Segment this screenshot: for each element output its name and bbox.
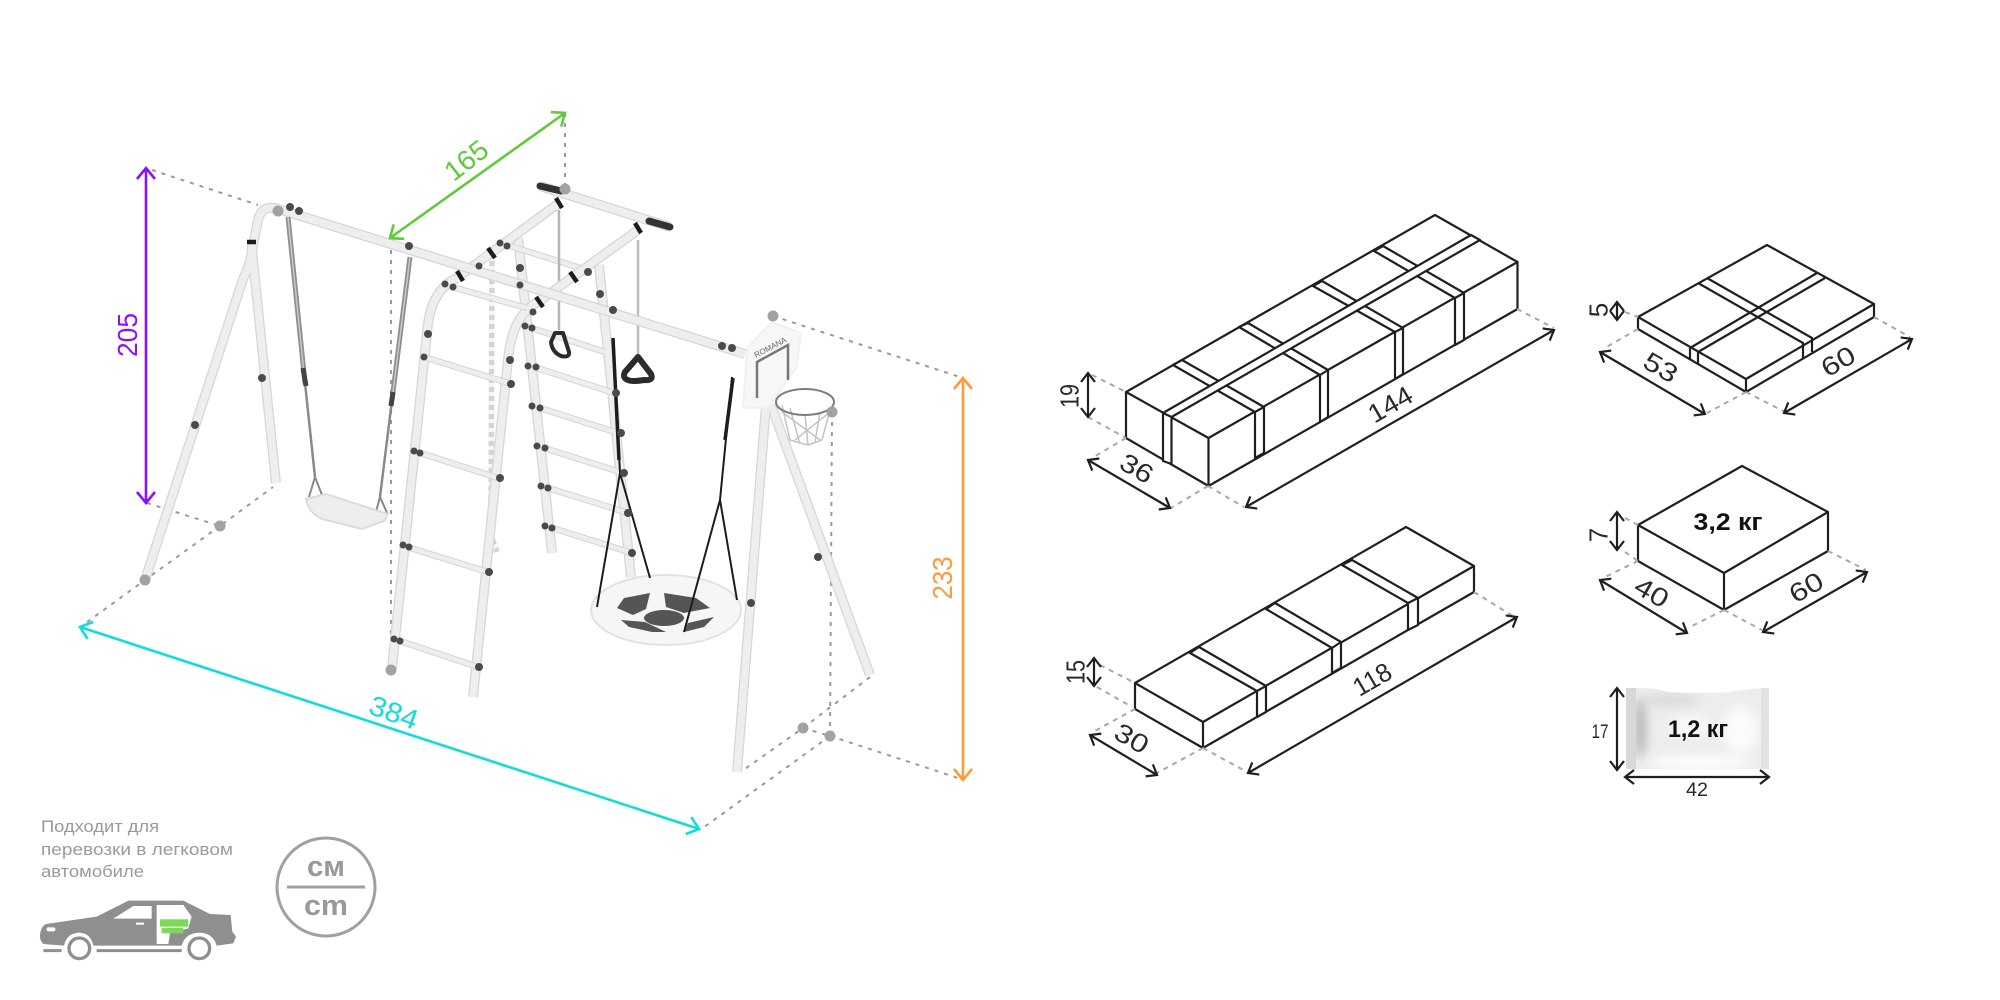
width dimension 384 bbox=[80, 627, 699, 829]
top frame beams and pull-up bar bbox=[457, 186, 670, 302]
main crossbar and left A-frame bbox=[146, 208, 745, 577]
package 4: box 3.2 kg: 7 bbox=[1583, 528, 1613, 542]
basketball hoop and net bbox=[776, 389, 834, 445]
icon: units badge cm: cm bbox=[304, 890, 348, 922]
basketball A-frame bbox=[737, 405, 870, 772]
height dimension 205: 205 bbox=[112, 313, 143, 357]
package 5: soft bag 1.2 kg: 42 bbox=[1686, 780, 1708, 801]
package 2: long flat box: 118 bbox=[1347, 656, 1397, 702]
package 3: flat square box: 53 bbox=[1638, 346, 1683, 389]
package 1: long box: 36 bbox=[1115, 447, 1159, 490]
basketball backboard: ROMANA bbox=[753, 335, 789, 360]
depth dimension 165: 165 bbox=[438, 134, 494, 187]
package 2: long flat box: 30 bbox=[1109, 717, 1154, 760]
package 3 straps bbox=[1690, 273, 1825, 364]
package 3: flat square box: 5 bbox=[1583, 303, 1613, 317]
package 1 cross straps bbox=[1173, 246, 1464, 458]
nest swing with black straps bbox=[591, 338, 741, 645]
package 4: box 3.2 kg: 60 bbox=[1784, 566, 1829, 609]
package 3: flat square box: 60 bbox=[1816, 340, 1861, 383]
dashed guide lines of the playset dimensions bbox=[79, 113, 963, 830]
back ladder bbox=[507, 238, 632, 577]
note: car transport text: автомобиле bbox=[41, 862, 144, 881]
note: car transport text bbox=[41, 817, 233, 881]
package 1: long box: 144 bbox=[1362, 380, 1418, 429]
climbing rope bbox=[491, 257, 497, 552]
package 4: box 3.2 kg: 3,2 кг bbox=[1694, 509, 1762, 536]
height dimension 233: 233 bbox=[927, 556, 958, 600]
package 2: long flat box: 15 bbox=[1060, 660, 1090, 684]
package 5: soft bag 1.2 kg: 1,2 кг bbox=[1668, 716, 1728, 743]
flat swing seat with ropes bbox=[288, 217, 410, 529]
icon: units badge cm: см bbox=[307, 851, 345, 883]
package 4: box 3.2 kg bbox=[1583, 466, 1867, 633]
depth dimension 165 bbox=[390, 113, 565, 238]
package 2: long flat box bbox=[1060, 527, 1517, 775]
package 1: long box bbox=[1054, 215, 1554, 508]
package 5: soft bag 1.2 kg bbox=[1592, 686, 1769, 801]
bolts and clamps on the frame bbox=[192, 198, 822, 670]
package 2 straps bbox=[1190, 560, 1418, 717]
front ladder bbox=[392, 278, 538, 697]
icon: units badge cm bbox=[277, 838, 375, 936]
reference points bbox=[140, 184, 838, 742]
infographic canvas bbox=[40, 110, 1914, 960]
package 1: long box: 19 bbox=[1054, 384, 1084, 408]
icon: car with packages bbox=[40, 901, 236, 959]
gymnastic rings bbox=[551, 210, 652, 381]
package 4: box 3.2 kg: 40 bbox=[1629, 571, 1674, 614]
package 5: soft bag 1.2 kg: 17 bbox=[1592, 722, 1608, 743]
package 3: flat square box bbox=[1583, 245, 1912, 414]
width dimension 384: 384 bbox=[365, 689, 423, 736]
basketball backboard bbox=[743, 322, 801, 408]
note: car transport text: Подходит для bbox=[41, 817, 159, 836]
note: car transport text: перевозки в легковом bbox=[41, 840, 233, 859]
